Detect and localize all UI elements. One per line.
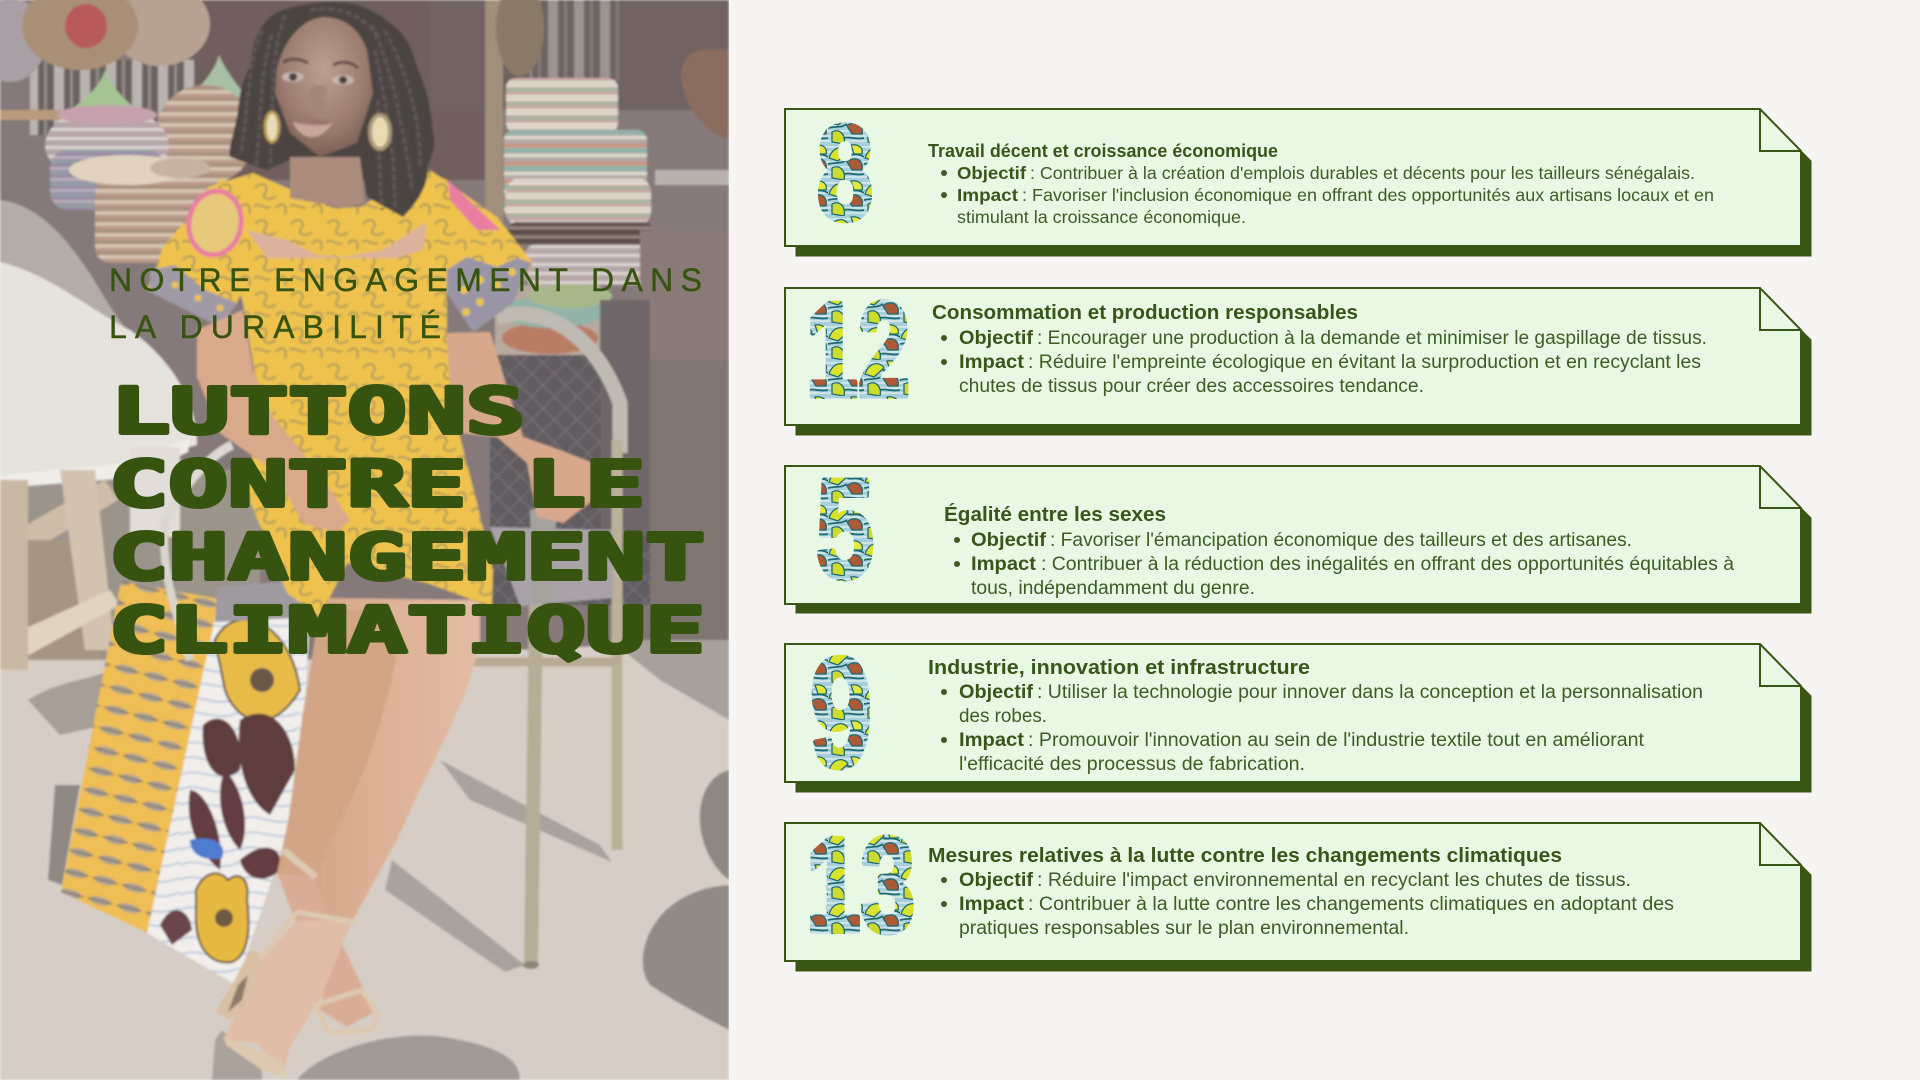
- goal 5 text: : Contribuer à la réduction des inégalités en offrant des opportunités équitables à: [1041, 554, 1734, 575]
- legs and feet: [277, 598, 480, 920]
- heading: main title: CLIMATIQUE: [109, 594, 705, 667]
- heading: main title: CONTRE LE: [109, 448, 645, 521]
- goal 13 text: : Réduire l'impact environnemental en recyclant les chutes de tissus.: [1037, 870, 1631, 891]
- panel: goal 8: [785, 99, 1811, 256]
- card shape with folded corner: [785, 644, 1811, 792]
- hair, face, earrings: [229, 2, 434, 217]
- goal 13 text: [941, 870, 1674, 939]
- goal 8 text: [941, 163, 1714, 227]
- photo panel: woman seated in a basket market: [0, 0, 729, 1080]
- number 9: 9: [810, 626, 872, 799]
- number 8: 8: [817, 99, 873, 248]
- goal 12 text: [941, 328, 1707, 397]
- fabric board: [61, 581, 219, 933]
- goal 12 text: Objectif: [959, 328, 1034, 349]
- panel: goal 12: [785, 276, 1811, 435]
- card shape with folded corner: [785, 466, 1811, 613]
- goal 8 text: stimulant la croissance économique.: [957, 207, 1246, 227]
- number 5: 5: [816, 450, 874, 607]
- goal 9 text: [941, 682, 1703, 775]
- goal 9 text: l'efficacité des processus de fabrication.: [959, 754, 1305, 775]
- goal 5 title: Égalité entre les sexes: [944, 503, 1166, 526]
- goal 5 text: tous, indépendamment du genre.: [971, 578, 1255, 599]
- goal 9 text: : Promouvoir l'innovation au sein de l'industrie textile tout en améliorant: [1028, 730, 1645, 751]
- goal 9 title: Industrie, innovation et infrastructure: [928, 656, 1310, 679]
- goal 13 text: : Contribuer à la lutte contre les changements climatiques en adoptant des: [1028, 894, 1674, 915]
- goal 13 text: Impact: [959, 894, 1025, 915]
- goal 12 text: chutes de tissus pour créer des accessoires tendance.: [959, 376, 1424, 397]
- heading: subtitle: NOTRE ENGAGEMENT DANS: [109, 262, 702, 298]
- dress: [207, 170, 493, 617]
- goal 9 text: : Utiliser la technologie pour innover dans la conception et la personnalisation: [1037, 682, 1703, 703]
- card shape with folded corner: [785, 109, 1811, 256]
- heading: main title: LUTTONS: [111, 375, 525, 448]
- heading: main title: [109, 375, 705, 667]
- panel: goal 5: [785, 450, 1811, 613]
- goal 5 text: [954, 530, 1734, 599]
- goal 9 text: des robes.: [959, 706, 1047, 727]
- goal 5 text: Impact: [971, 554, 1037, 575]
- goal 12 text: : Réduire l'empreinte écologique en évitant la surproduction et en recyclant les: [1028, 352, 1701, 373]
- cloth and stool: [0, 199, 124, 326]
- chair: [497, 314, 620, 453]
- card shape with folded corner: [785, 288, 1811, 435]
- goal 13 text: Objectif: [959, 870, 1034, 891]
- goal 8 title: Travail décent et croissance économique: [928, 141, 1278, 161]
- goal 8 text: : Favoriser l'inclusion économique en offrant des opportunités aux artisans locaux et en: [1022, 185, 1714, 205]
- goal 13 title: Mesures relatives à la lutte contre les changements climatiques: [928, 844, 1562, 867]
- goal 5 text: : Favoriser l'émancipation économique des tailleurs et des artisanes.: [1050, 530, 1632, 551]
- panel: goal 9: [785, 626, 1811, 799]
- floor: [0, 640, 729, 1080]
- goal 12 title: Consommation et production responsables: [932, 301, 1358, 324]
- goal 5 text: Objectif: [971, 530, 1047, 551]
- goal 12 text: : Encourager une production à la demande et minimiser le gaspillage de tissus.: [1037, 328, 1707, 349]
- heading: main title: CHANGEMENT: [109, 521, 705, 594]
- goal 8 text: Impact: [957, 185, 1018, 205]
- number 13: 13: [806, 811, 915, 960]
- goal 9 text: Impact: [959, 730, 1025, 751]
- card shape with folded corner: [785, 823, 1811, 971]
- goal 12 text: Impact: [959, 352, 1025, 373]
- panel: goal 13: [785, 811, 1811, 971]
- arms: [197, 310, 350, 533]
- goal 9 text: Objectif: [959, 682, 1034, 703]
- heading: subtitle: [109, 262, 702, 345]
- number 12: 12: [806, 276, 910, 425]
- heading: subtitle: LA DURABILITÉ: [109, 309, 441, 345]
- goal 8 text: : Contribuer à la création d'emplois durables et décents pour les tailleurs sénégalais.: [1030, 163, 1695, 183]
- goal 8 text: Objectif: [957, 163, 1026, 183]
- goal 13 text: pratiques responsables sur le plan environnemental.: [959, 918, 1409, 939]
